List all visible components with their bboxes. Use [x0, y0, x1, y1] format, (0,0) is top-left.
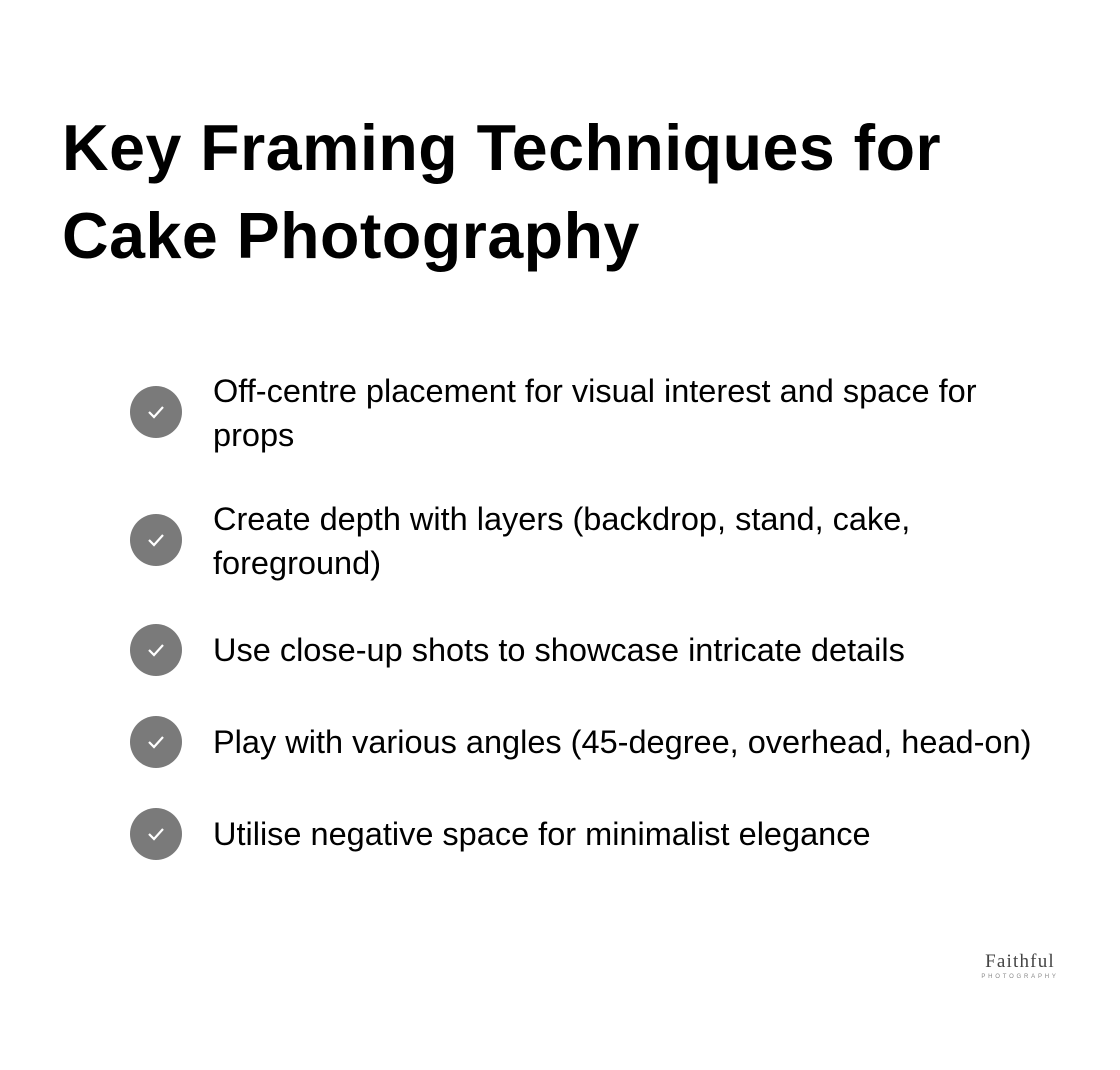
icon: check	[130, 386, 182, 438]
text 1: Off-centre placement for visual interest and space for props	[213, 373, 977, 453]
icon: check	[130, 514, 182, 566]
logo: PHOTOGRAPHY	[981, 974, 1059, 980]
text 4: Play with various angles (45-degree, overhead, head-on)	[213, 724, 1031, 760]
item 5	[130, 808, 871, 860]
text 3: Use close-up shots to showcase intricate details	[213, 632, 905, 668]
item 2	[130, 501, 910, 581]
text 2: Create depth with layers (backdrop, stand, cake, foreground)	[213, 501, 910, 581]
icon: check	[130, 716, 182, 768]
title	[62, 112, 941, 272]
item 4	[130, 716, 1031, 768]
logo: Faithful	[985, 951, 1055, 972]
item 1	[130, 373, 977, 453]
text 5: Utilise negative space for minimalist elegance	[213, 816, 871, 852]
item 3	[130, 624, 905, 676]
title: Key Framing Techniques for	[62, 112, 941, 184]
icon: check	[130, 808, 182, 860]
title: Cake Photography	[62, 200, 640, 272]
icon: check	[130, 624, 182, 676]
logo	[981, 951, 1059, 980]
